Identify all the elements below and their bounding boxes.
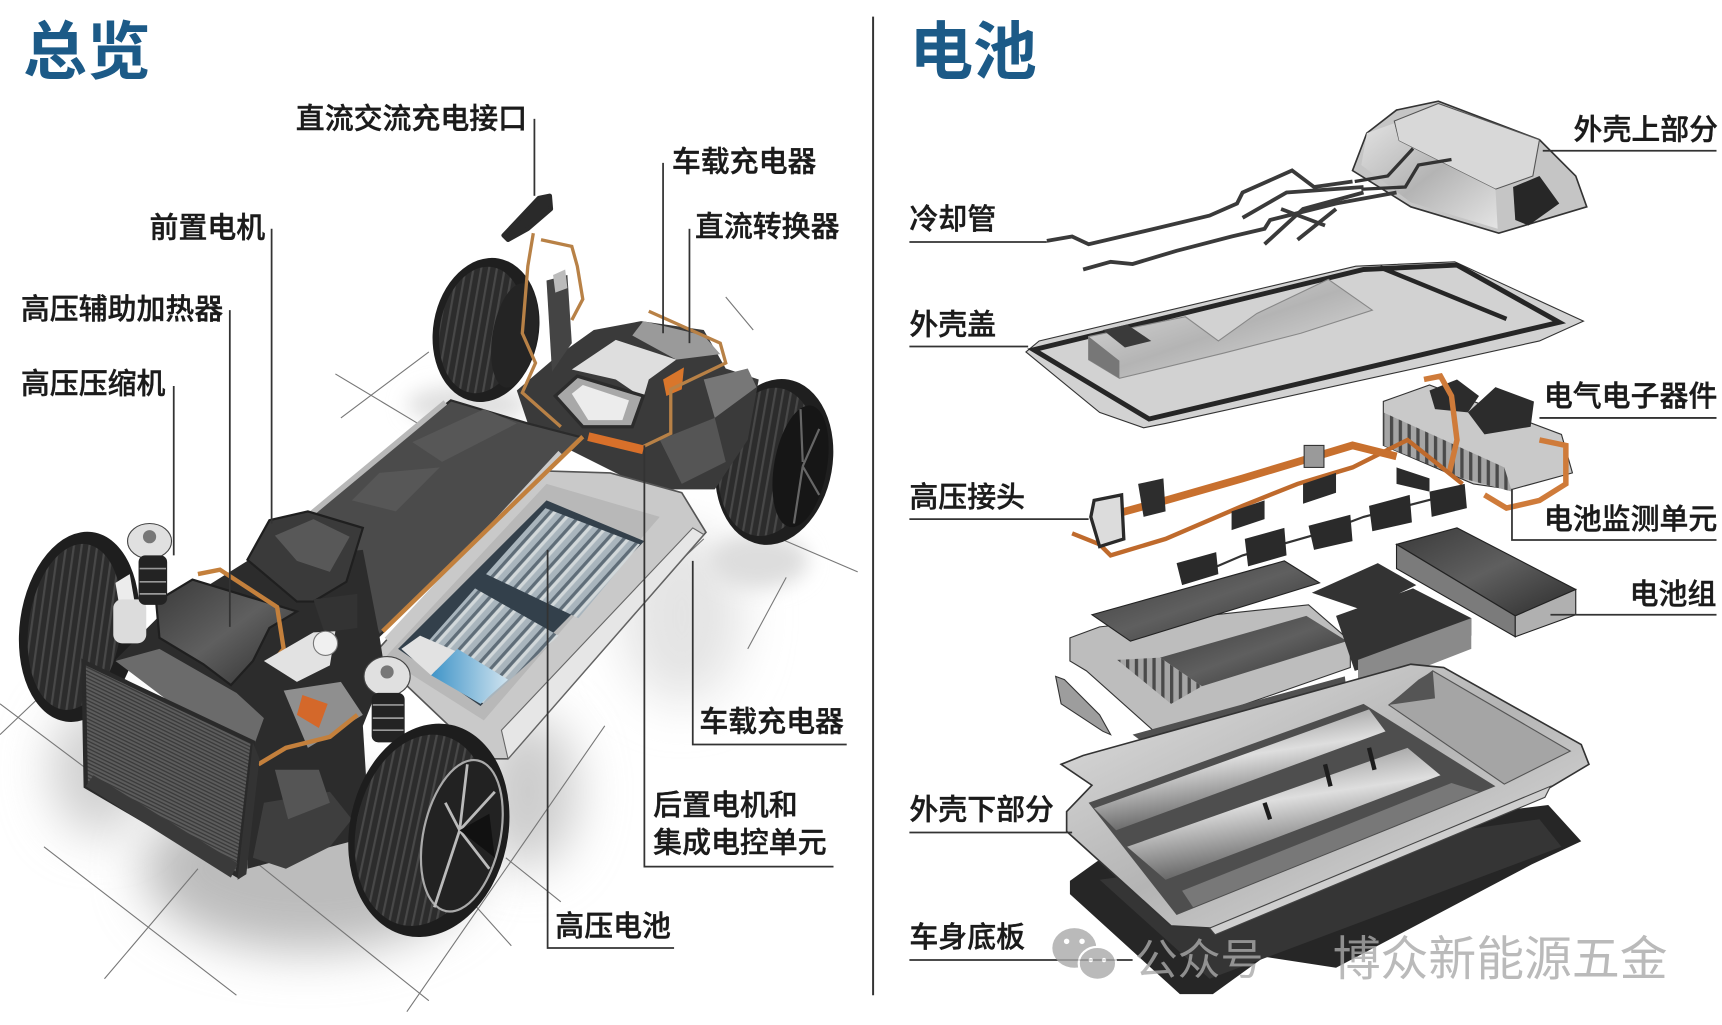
label: rear motor and integrated control unit: 集成电控单元 bbox=[653, 827, 827, 859]
rear subframe and electronics bbox=[504, 196, 759, 489]
divider bbox=[872, 17, 874, 995]
front motor and dark housings bbox=[156, 511, 363, 685]
label: on-board charger top: 车载充电器 bbox=[672, 147, 816, 179]
casing cover bbox=[1026, 262, 1583, 428]
watermark text: 公众号 bbox=[1135, 936, 1263, 984]
label: casing lower part: 外壳下部分 bbox=[909, 794, 1054, 826]
front mechanical bay bbox=[113, 574, 363, 869]
front left strut bbox=[128, 523, 172, 605]
label: front motor: 前置电机 bbox=[150, 213, 265, 245]
panel: battery bbox=[909, 16, 1718, 994]
battery pack modules bbox=[1056, 528, 1576, 759]
wheel: rear right bbox=[702, 369, 846, 554]
label: cooling pipe: 冷却管 bbox=[909, 204, 996, 236]
battery monitoring units bbox=[1177, 484, 1467, 585]
radiator bbox=[84, 662, 260, 880]
electronic components bbox=[1383, 376, 1572, 508]
label: high voltage connector: 高压接头 bbox=[909, 482, 1025, 514]
label: electronics: 电气电子器件 bbox=[1544, 381, 1717, 413]
orange cables rear bbox=[522, 233, 726, 450]
watermark name: 博众新能源五金 bbox=[1333, 933, 1668, 986]
floor shadows and ground lines bbox=[0, 297, 858, 1012]
casing lower part bbox=[1061, 664, 1589, 935]
label: underbody: 车身底板 bbox=[909, 922, 1025, 954]
label: high voltage battery: 高压电池 bbox=[555, 911, 671, 943]
battery lid: dark cover bbox=[308, 400, 583, 640]
label: upper casing: 外壳上部分 bbox=[1574, 115, 1718, 147]
label: casing cover bbox=[909, 309, 1028, 346]
label: battery pack: 电池组 bbox=[1630, 579, 1716, 611]
label: high voltage battery bbox=[548, 550, 674, 948]
wheel: rear left bbox=[421, 249, 551, 411]
label: on-board charger lower: 车载充电器 bbox=[699, 706, 844, 738]
label: battery monitoring unit bbox=[1512, 489, 1717, 540]
battery tray: frame bbox=[374, 471, 706, 759]
underbody floor bbox=[1070, 805, 1581, 994]
title: overview: 总览 bbox=[23, 16, 151, 88]
label: cooling pipe bbox=[909, 204, 1047, 242]
label: battery monitoring unit: 电池监测单元 bbox=[1544, 504, 1717, 536]
battery cells bbox=[398, 500, 644, 706]
label: casing cover: 外壳盖 bbox=[909, 309, 996, 341]
label: high voltage compressor: 高压压缩机 bbox=[21, 369, 166, 401]
label: DC converter: 直流转换器 bbox=[695, 211, 840, 243]
cooling pipes bbox=[1047, 171, 1397, 269]
front bay base bbox=[115, 550, 385, 869]
label: on-board charger lower bbox=[693, 561, 847, 745]
label: DC AC charging port: 直流交流充电接口 bbox=[296, 104, 527, 136]
icon: wechat bbox=[1052, 928, 1116, 980]
front right strut bbox=[364, 657, 410, 742]
wheel: front right bbox=[329, 708, 529, 952]
label: rear motor and integrated control unit bbox=[644, 445, 834, 867]
label: high voltage auxiliary heater: 高压辅助加热器 bbox=[21, 294, 223, 326]
label: rear motor and integrated control unit: 后置电机和 bbox=[653, 790, 798, 822]
wheel: front left bbox=[7, 524, 151, 730]
watermark bbox=[1052, 928, 1668, 986]
high voltage harness bbox=[1072, 440, 1462, 555]
panel: overview bbox=[0, 16, 858, 1012]
title: battery: 电池 bbox=[909, 16, 1037, 88]
upper casing bbox=[1353, 101, 1587, 233]
